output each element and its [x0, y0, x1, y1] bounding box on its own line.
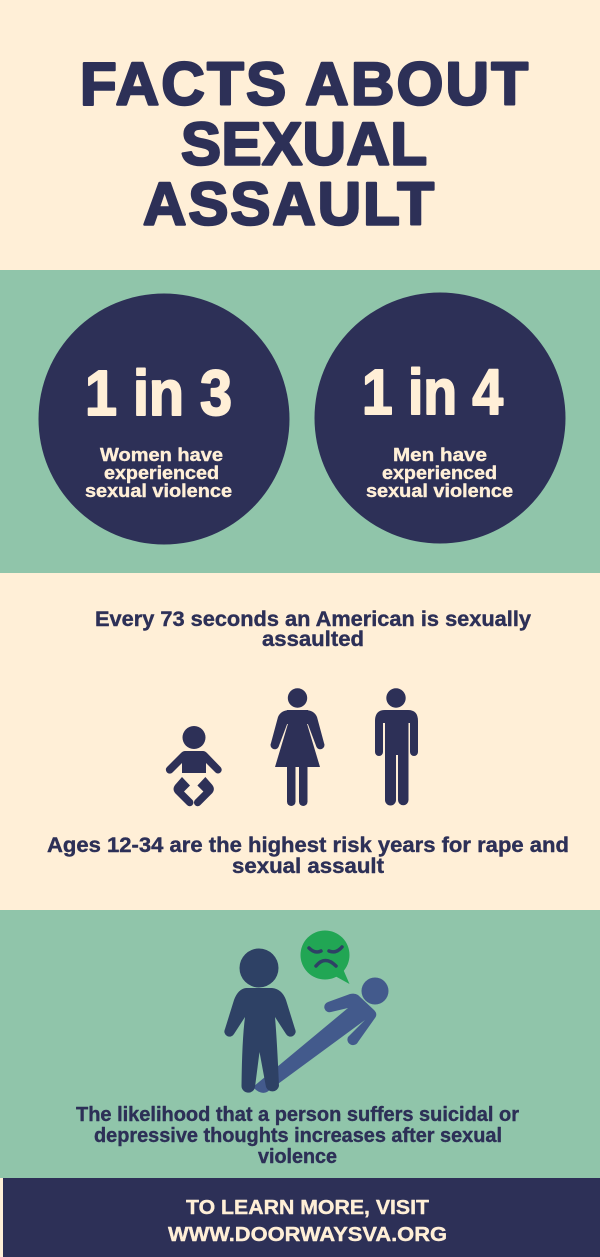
- icon: sad speech bubble: [300, 930, 350, 984]
- text: every 73 seconds: [95, 608, 531, 651]
- icon: baby: [166, 726, 222, 806]
- title: SEXUAL: [181, 110, 427, 178]
- text: every 73 seconds: assaulted: [262, 628, 364, 651]
- text: call to action: TO LEARN MORE, VISIT: [186, 1197, 429, 1219]
- panel: title background: [0, 0, 600, 270]
- icon: woman: [270, 688, 324, 806]
- text: women have experienced sexual violence: experienced: [104, 463, 219, 483]
- text: suicidal or depressive thoughts: depressive thoughts increases after sexual: [94, 1125, 502, 1147]
- title: [80, 50, 528, 238]
- text: women have experienced sexual violence: sexual violence: [85, 481, 232, 501]
- title: ASSAULT: [143, 170, 434, 238]
- statistic: women: [38, 294, 290, 544]
- icon: person standing: [224, 948, 296, 1093]
- panel: footer edge: [0, 1178, 3, 1257]
- panel: mental health background: [0, 910, 600, 1178]
- text: men have experienced sexual violence: experienced: [382, 463, 497, 483]
- text: highest risk ages: [47, 834, 569, 878]
- text: suicidal or depressive thoughts: [76, 1104, 519, 1168]
- text: men have experienced sexual violence: sexual violence: [366, 481, 513, 501]
- text: highest risk ages: Ages 12-34 are the highest risk years for rape and: [47, 834, 569, 857]
- icon: person lying down: [253, 978, 388, 1093]
- text: men have experienced sexual violence: [366, 445, 513, 501]
- panel: statistics background: [0, 270, 600, 573]
- text: suicidal or depressive thoughts: The likelihood that a person suffers suicidal or: [76, 1104, 519, 1126]
- circle: men: [314, 292, 566, 544]
- panel: age and frequency background: [0, 573, 600, 910]
- statistic: men: [314, 292, 566, 544]
- number: 1 in 3: 1 in 3: [85, 357, 232, 429]
- text: call to action: WWW.DOORWAYSVA.ORG: [168, 1224, 447, 1246]
- text: women have experienced sexual violence: [85, 445, 232, 501]
- title: FACTS ABOUT: [80, 50, 528, 118]
- icon: man: [375, 688, 418, 806]
- text: every 73 seconds: Every 73 seconds an American is sexually: [95, 608, 531, 631]
- number: 1 in 4: 1 in 4: [362, 356, 503, 428]
- footer band: [3, 1178, 600, 1257]
- text: women have experienced sexual violence: Women have: [100, 445, 223, 465]
- text: suicidal or depressive thoughts: violence: [258, 1146, 337, 1168]
- text: call to action: [168, 1197, 447, 1246]
- circle: women: [38, 294, 290, 544]
- text: highest risk ages: sexual assault: [232, 855, 384, 878]
- text: men have experienced sexual violence: Men have: [393, 445, 487, 465]
